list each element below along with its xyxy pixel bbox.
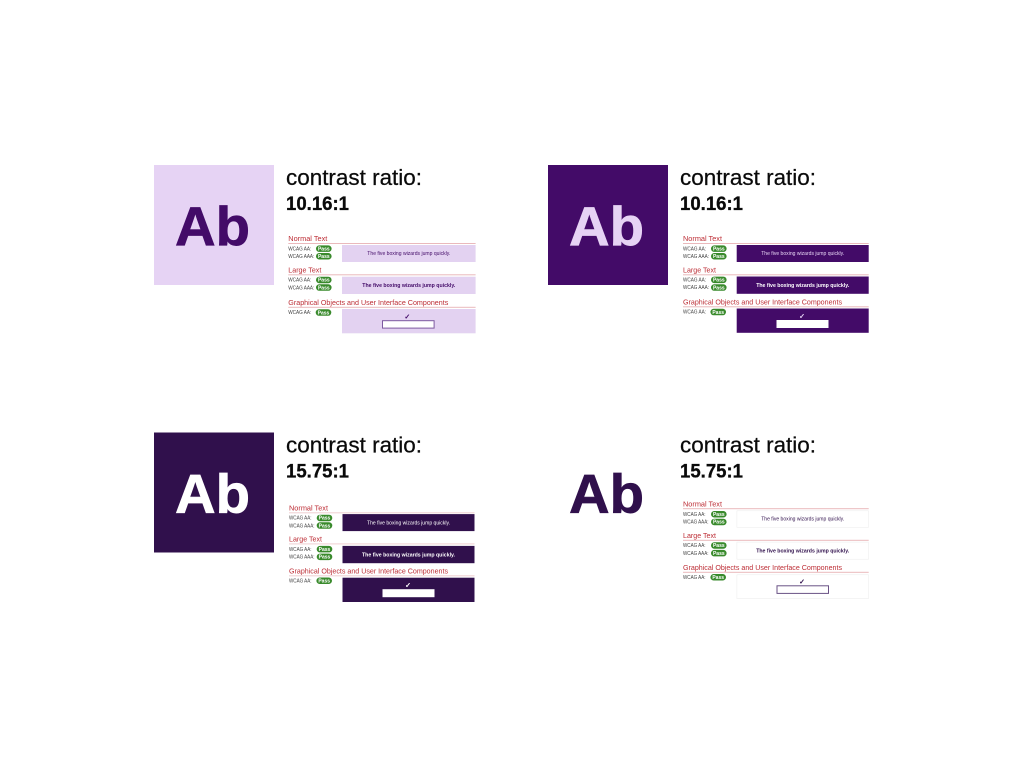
heading: contrast ratio (286, 432, 422, 482)
section: normal text: Normal Text (683, 234, 723, 243)
section: normal text: The five boxing wizards jump quickly. (367, 520, 450, 526)
section: large text: Pass (318, 278, 330, 284)
section: large text: Pass (713, 278, 725, 284)
section: graphical objects: WCAG AA: (289, 579, 312, 585)
section: graphical objects: Pass (712, 310, 724, 316)
section: graphical objects: Pass (712, 575, 724, 581)
section: normal text: The five boxing wizards jump quickly. (761, 517, 845, 523)
section: normal text: Pass (319, 516, 331, 522)
section: large text: Pass (319, 547, 331, 553)
section: normal text: Pass (713, 512, 725, 518)
section: large text: WCAG AA: (289, 547, 312, 553)
section: large text: WCAG AAA: (683, 285, 709, 291)
heading: contrast ratio: contrast ratio: (286, 432, 422, 458)
section: graphical objects (289, 566, 474, 602)
section: graphical objects: Pass (318, 578, 330, 584)
section: normal text: WCAG AAA: (288, 254, 314, 260)
section: normal text: Normal Text (683, 500, 723, 509)
section: large text (683, 265, 869, 294)
section: normal text (289, 503, 474, 531)
colour swatch: Ab on very dark purple (154, 432, 274, 552)
heading: contrast ratio (680, 165, 816, 215)
section: graphical objects (288, 298, 476, 333)
heading: contrast ratio: 10.16:1 (286, 193, 349, 215)
section: large text: WCAG AA: (288, 278, 311, 284)
section: normal text (683, 500, 869, 527)
section: graphical objects (683, 563, 869, 599)
section: graphical objects: Graphical Objects and User Interface Components (288, 298, 448, 307)
section: large text: Pass (713, 285, 725, 291)
section: normal text: Pass (319, 523, 331, 529)
heading: contrast ratio (286, 165, 422, 215)
heading: contrast ratio: contrast ratio: (680, 432, 816, 458)
section: large text (683, 531, 869, 559)
section: normal text: The five boxing wizards jump quickly. (367, 251, 451, 257)
section: normal text: WCAG AAA: (289, 523, 314, 529)
section: large text: WCAG AAA: (288, 285, 314, 291)
heading: contrast ratio (680, 432, 816, 482)
section: large text: WCAG AA: (683, 277, 706, 283)
heading: contrast ratio: 15.75:1 (680, 460, 743, 482)
section: large text: The five boxing wizards jump quickly. (362, 283, 456, 289)
heading: contrast ratio: 15.75:1 (286, 460, 349, 482)
section: normal text: WCAG AA: (289, 516, 312, 522)
section: graphical objects: WCAG AA: (683, 310, 706, 316)
section: graphical objects: WCAG AA: (683, 575, 706, 581)
section: large text: Pass (713, 543, 725, 549)
colour swatch: Ab on lilac (154, 165, 274, 285)
section: graphical objects: ✓ (405, 582, 411, 590)
heading: contrast ratio: contrast ratio: (680, 165, 816, 190)
section: normal text: The five boxing wizards jump quickly. (761, 251, 845, 257)
section: large text: WCAG AA: (683, 543, 706, 549)
panel: light lilac background with dark purple text, 10.16:1 (154, 165, 476, 333)
section: large text: The five boxing wizards jump quickly. (362, 552, 455, 558)
section: graphical objects: WCAG AA: (288, 310, 311, 316)
section: graphical objects (683, 298, 869, 333)
section: graphical objects: Graphical Objects and User Interface Components (683, 563, 842, 572)
section: large text: The five boxing wizards jump quickly. (756, 283, 850, 289)
section: normal text: Pass (713, 254, 725, 260)
panel: dark purple background with lilac text, 10.16:1 (548, 165, 869, 333)
section: normal text (683, 234, 869, 262)
section: graphical objects: ✓ (404, 313, 410, 321)
section: normal text: WCAG AA: (683, 246, 706, 252)
section: large text: WCAG AAA: (289, 554, 314, 560)
section: graphical objects: Graphical Objects and User Interface Components (289, 566, 448, 576)
section: normal text: WCAG AAA: (683, 254, 709, 260)
section: large text: Pass (713, 551, 725, 557)
section: normal text (288, 234, 476, 262)
section: large text: Pass (319, 555, 331, 561)
section: large text: Large Text (288, 266, 322, 275)
section: large text: Large Text (683, 265, 717, 274)
section: large text (288, 266, 476, 294)
section: large text: WCAG AAA: (683, 551, 708, 557)
section: normal text: Normal Text (288, 234, 328, 243)
section: normal text: WCAG AAA: (683, 520, 708, 526)
colour swatch: Ab on very dark purple: Ab (175, 462, 250, 524)
section: large text: Large Text (683, 531, 717, 540)
section: large text: Pass (318, 285, 330, 291)
colour swatch: Ab on white: Ab (569, 462, 644, 524)
section: normal text: Normal Text (289, 503, 329, 512)
section: normal text: WCAG AA: (683, 512, 706, 518)
heading: contrast ratio: 10.16:1 (680, 193, 743, 215)
section: graphical objects: ✓ (799, 578, 805, 586)
panel: very dark purple background with white text, 15.75:1 (154, 432, 474, 602)
section: graphical objects: ✓ (799, 312, 805, 320)
section: normal text: Pass (713, 520, 725, 526)
heading: contrast ratio: contrast ratio: (286, 165, 422, 190)
section: graphical objects: Pass (318, 310, 330, 316)
colour swatch: Ab on lilac: Ab (175, 195, 250, 257)
section: large text: The five boxing wizards jump quickly. (756, 549, 850, 555)
colour swatch: Ab on dark purple (548, 165, 668, 285)
section: normal text: WCAG AA: (288, 246, 311, 252)
section: graphical objects: Graphical Objects and User Interface Components (683, 298, 842, 306)
section: normal text: Pass (713, 246, 725, 252)
section: normal text: Pass (318, 254, 330, 260)
section: large text: Large Text (289, 535, 323, 544)
panel: white background with very dark purple text, 15.75:1 (569, 432, 869, 599)
section: normal text: Pass (318, 246, 330, 252)
colour swatch: Ab on dark purple: Ab (569, 195, 644, 257)
section: large text (289, 535, 474, 563)
